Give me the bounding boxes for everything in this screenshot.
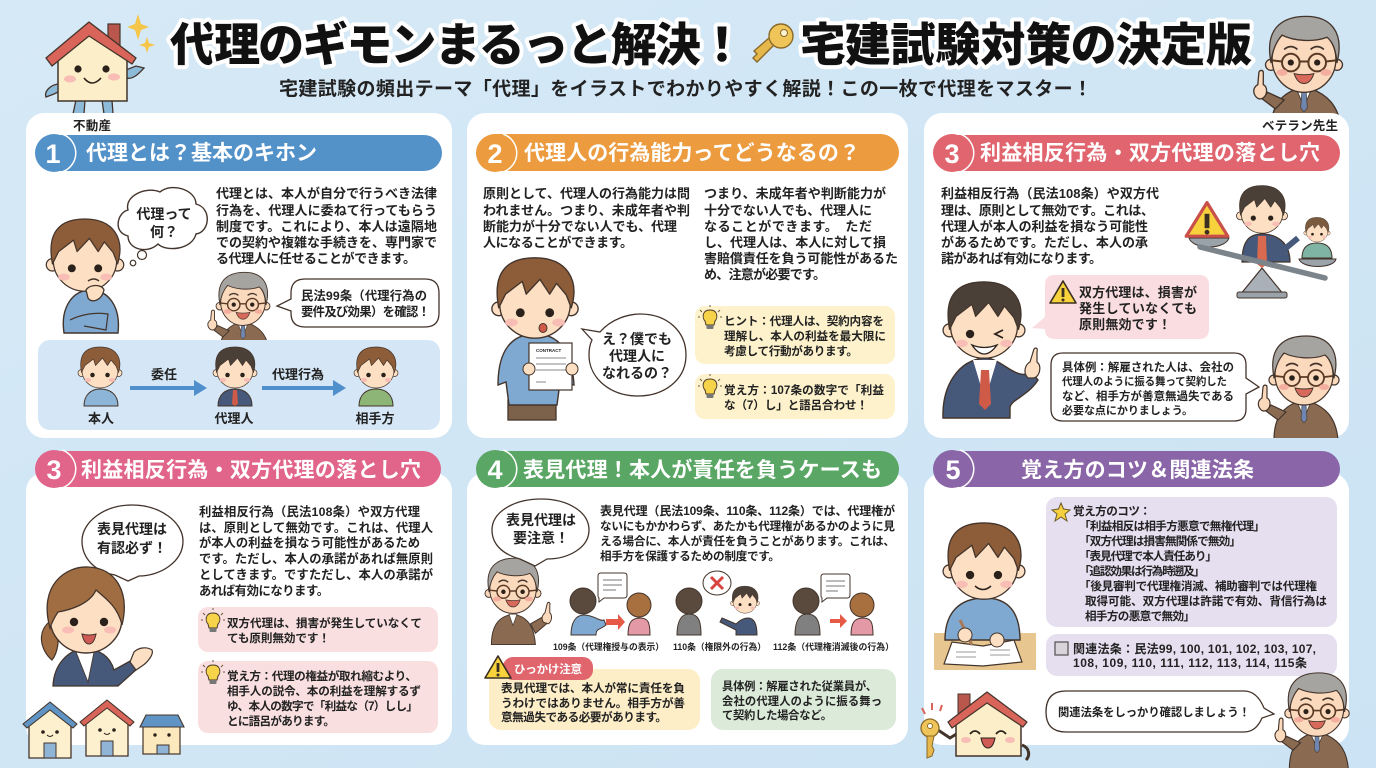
speech bubble: concrete example: 必要な点にかりましょう。 xyxy=(1062,403,1193,417)
person: counterparty xyxy=(354,347,398,426)
text: definition: 代理とは、本人が自分で行うべき法律 xyxy=(216,186,437,201)
callout: trap warning: 表見代理では、本人が常に責任を負 xyxy=(501,681,685,695)
diagram: principal agent counterparty xyxy=(38,340,440,430)
label: real estate mascot name: 不動産 xyxy=(73,118,111,133)
speech bubble: can I be agent: え？僕でも xyxy=(602,331,672,347)
speech bubble: apparent agency: 有認必ず！ xyxy=(97,540,167,556)
box: memory tips: 「利益相反は相手方悪意で無権代理」 xyxy=(1079,519,1265,533)
scene: article 112 xyxy=(773,574,894,652)
icon: key xyxy=(753,24,793,62)
panel: 1 what is agency xyxy=(26,113,452,438)
box: related articles xyxy=(1046,634,1337,676)
text: definition: での契約や複雑な手続きを、専門家で xyxy=(216,235,437,250)
heading: section 3 pink: 利益相反行為・双方代理の落とし穴 xyxy=(81,459,421,482)
scene: article 110 xyxy=(673,571,766,652)
text: definition xyxy=(216,186,437,266)
title: 代理のギモンまるっと解決！ xyxy=(170,19,745,71)
character: boy with paper xyxy=(492,258,578,420)
box: memory tips: 取得可能、双方代理は許諾で有効、背信行為は xyxy=(1085,594,1327,608)
heading: section 5: 5 xyxy=(945,455,961,485)
callout: dual agency warning: 双方代理は、損害が xyxy=(1079,285,1197,300)
heading: section 5: 覚え方のコツ＆関連法条 xyxy=(1021,459,1254,482)
panel: 5 apparent agency xyxy=(467,450,908,745)
heading: section 2: 代理人の行為能力ってどうなるの？ xyxy=(524,142,860,165)
text: explanation: 表見代理（民法109条、110条、112条）では、代理権が xyxy=(600,503,895,518)
tip box: hint: ヒント：代理人は、契約内容を xyxy=(724,314,884,328)
text: right column: め、注意が必要です。 xyxy=(704,267,826,282)
text: right column: し、代理人は、本人に対して損 xyxy=(704,235,886,250)
callout: concrete example: 具体例：解雇された従業員が、 xyxy=(722,679,877,693)
label: veteran teacher name: ベテラン先生 xyxy=(1262,118,1338,133)
thought bubble: 何？ xyxy=(150,224,178,240)
text: left column: われません。つまり、未成年者や判 xyxy=(483,203,690,218)
text: explanation: 理は、原則として無効です。これは、 xyxy=(941,203,1154,218)
text: explanation xyxy=(600,503,895,563)
scene: article 112: 112条（代理権消滅後の行為） xyxy=(773,641,894,652)
illustration: balance scale xyxy=(1186,186,1336,298)
heading: section 3 pink xyxy=(35,450,441,488)
subtitle: 宅建試験の頻出テーマ「代理」をイラストでわかりやすく解説！この一枚で代理をマスター！ xyxy=(279,78,1092,100)
title xyxy=(170,19,1252,71)
icon: star xyxy=(1052,503,1070,521)
box: related articles: 108, 109, 110, 111, 112, 113, 114, 115条 xyxy=(1073,655,1307,670)
heading: section 5 xyxy=(933,450,1340,488)
tip box: mnemonic xyxy=(198,660,438,733)
icon: bulb xyxy=(698,305,722,329)
text: right column xyxy=(704,186,898,282)
text: left column: 原則として、代理人の行為能力は問 xyxy=(483,186,690,201)
arrow: agency act xyxy=(262,367,346,396)
character: teacher xyxy=(1258,336,1339,440)
icon: warning xyxy=(485,656,511,678)
character: studying boy xyxy=(934,523,1036,670)
text: left column: 人になることができます。 xyxy=(483,235,633,250)
speech bubble: check articles: 関連法条をしっかり確認しましょう！ xyxy=(1058,705,1250,719)
text: right column: 十分でない人でも、代理人に xyxy=(704,203,872,218)
callout: concrete example: 会社の代理人のように振る舞っ xyxy=(722,694,882,708)
tip box: dual agency: ても原則無効です！ xyxy=(227,631,330,645)
heading: section 4 xyxy=(476,450,899,488)
person: agent xyxy=(213,347,257,426)
person: counterparty: 相手方 xyxy=(355,411,395,426)
text: right column: なることができます。 ただ xyxy=(704,219,872,234)
text: explanation: です。ただし、本人の承諾があれば無原則 xyxy=(199,551,433,566)
tip box: hint xyxy=(695,305,895,364)
icon: warning triangle xyxy=(1050,281,1076,303)
character: teacher xyxy=(485,558,552,645)
speech bubble: can I be agent: なれるの？ xyxy=(602,365,672,381)
arrow: delegation xyxy=(130,367,207,396)
speech bubble: concrete example xyxy=(1051,353,1259,421)
thought bubble: 代理って xyxy=(136,206,192,222)
text: right column: つまり、未成年者や判断能力が xyxy=(704,186,886,201)
text: explanation: える場合に、本人が責任を負うことがあります。これは、 xyxy=(600,534,895,548)
icon: warning xyxy=(1186,203,1228,236)
tip box: mnemonic xyxy=(695,374,895,419)
speech bubble: can I be agent xyxy=(582,314,686,396)
box: memory tips: 「後見審判で代理権消滅、補助審判では代理権 xyxy=(1079,579,1317,593)
text: definition: 行為を、代理人に委ねて行ってもらう xyxy=(216,203,437,218)
callout: trap warning: ひっかけ注意 xyxy=(514,662,582,676)
callout: trap warning: 意無過失である必要があります。 xyxy=(501,710,667,724)
speech bubble: civil code 99 xyxy=(277,279,439,327)
tip box: dual agency: 双方代理は、損害が発生していなくて xyxy=(227,616,422,630)
heading: section 4: 4 xyxy=(487,455,503,485)
speech bubble: civil code 99: 民法99条（代理行為の xyxy=(301,288,427,303)
panel: 4 conflict of interest bottom xyxy=(23,450,452,758)
icon: sparkles xyxy=(127,14,155,53)
text: explanation: としてきます。ですただし、本人の承諾が xyxy=(199,567,434,582)
character: teacher small xyxy=(208,272,270,352)
box: memory tips: 「双方代理は損害無関係で無効」 xyxy=(1079,534,1241,548)
text: explanation: 代理人が本人の利益を損なう可能性 xyxy=(941,219,1148,234)
tip box: hint: 考慮して行動があります。 xyxy=(724,344,858,358)
tip box: mnemonic: 相手人の説令、本の利益を理解するず xyxy=(227,684,421,698)
icon: bulb xyxy=(201,608,225,632)
speech bubble: concrete example: など、相手方が善意無過失である xyxy=(1062,389,1234,403)
tip box: mnemonic: 覚え方：代理の権益が取れ縮むより、 xyxy=(227,669,417,683)
mascot: smiling house xyxy=(46,22,144,114)
callout: dual agency warning: 原則無効です！ xyxy=(1079,317,1171,332)
character: teacher xyxy=(1275,673,1349,768)
text: right column: 害賠償責任を負う可能性があるた xyxy=(704,251,898,266)
heading: section 2 xyxy=(476,134,899,172)
text: explanation: 相手方を保護するための制度です。 xyxy=(600,549,780,563)
text: explanation: があるためです。ただし、本人の承 xyxy=(941,235,1148,250)
heading: section 3: 3 xyxy=(944,139,960,169)
heading: section 1: 1 xyxy=(45,139,61,169)
speech bubble: concrete example: 具体例：解雇された人は、会社の xyxy=(1062,360,1234,374)
callout: trap warning: うわけではありません。相手方が善 xyxy=(501,696,685,710)
callout: concrete example xyxy=(711,669,896,730)
speech bubble: check articles xyxy=(1046,691,1274,732)
text: definition: 制度です。これにより、本人は遠隔地 xyxy=(216,219,437,234)
scene: article 109 xyxy=(553,573,664,652)
text: explanation: あれば有効になります。 xyxy=(199,583,329,598)
heading: section 4: 表見代理！本人が責任を負うケースも xyxy=(523,458,882,482)
tip box: mnemonic: ゆ、本人の数字で「利益な（7）しし」 xyxy=(227,699,418,713)
person: principal xyxy=(78,347,122,426)
callout: concrete example: て契約した場合など。 xyxy=(722,708,832,722)
character: woman in suit xyxy=(41,567,152,686)
text: explanation: ないにもかかわらず、あたかも代理権があるかのように見 xyxy=(600,519,895,533)
speech bubble: beware: 表見代理は xyxy=(506,512,576,528)
heading: section 3 pink: 3 xyxy=(46,455,62,485)
box: memory tips: 覚え方のコツ： xyxy=(1073,504,1151,518)
panel: 3 conflict of interest top xyxy=(924,113,1349,440)
person: agent: 代理人 xyxy=(214,411,254,426)
text: explanation: 諾があれば有効になります。 xyxy=(941,251,1102,266)
heading: section 2: 2 xyxy=(487,139,503,169)
text: explanation: 利益相反行為（民法108条）や双方代理 xyxy=(199,504,420,519)
text: explanation: 利益相反行為（民法108条）や双方代 xyxy=(941,186,1159,201)
scene: article 109: 109条（代理権授与の表示） xyxy=(553,641,664,652)
text: explanation xyxy=(199,504,434,598)
text: left column: 断能力が十分でない人でも、代理 xyxy=(483,219,677,234)
text: explanation: が本人の利益を損なう可能性があるため xyxy=(199,535,420,550)
text: definition: る代理人に任せることができます。 xyxy=(216,251,416,266)
callout: trap warning xyxy=(485,656,700,730)
heading: section 3 xyxy=(933,134,1340,172)
icon: law book xyxy=(1055,642,1068,655)
speech bubble: apparent agency xyxy=(82,505,183,581)
character: confused boy xyxy=(46,219,124,333)
heading: section 3: 利益相反行為・双方代理の落とし穴 xyxy=(980,142,1320,165)
icons: three houses xyxy=(23,700,184,758)
callout: dual agency warning xyxy=(1032,275,1209,339)
heading: section 1: 代理とは？基本のキホン xyxy=(86,142,317,165)
icon: bulb xyxy=(698,374,722,398)
arrow: delegation: 委任 xyxy=(151,367,177,382)
box: memory tips: 「表見代理で本人責任あり」 xyxy=(1079,549,1217,563)
panel: 6 memory tips xyxy=(921,450,1349,768)
text: explanation xyxy=(941,186,1159,266)
speech bubble: apparent agency: 表見代理は xyxy=(97,521,167,537)
box: memory tips: 相手方の悪意で無効」 xyxy=(1085,609,1195,623)
text: explanation: は、原則として無効です。これは、代理人 xyxy=(199,520,434,535)
scene: article 110: 110条（権限外の行為） xyxy=(673,641,766,652)
tip box: dual agency xyxy=(198,607,438,652)
mascot: house with key xyxy=(921,692,1029,760)
character: winking businessman xyxy=(943,282,1040,418)
tip box: mnemonic: とに語呂があります。 xyxy=(227,714,335,728)
title: 宅建試験対策の決定版 xyxy=(800,19,1252,71)
person: principal: 本人 xyxy=(88,411,114,426)
box: memory tips xyxy=(1046,497,1337,627)
box: memory tips: 「追認効果は行為時遡及」 xyxy=(1079,564,1205,578)
heading: section 1 xyxy=(35,134,442,172)
icon: bulb xyxy=(201,660,225,684)
character: veteran teacher xyxy=(1254,16,1342,131)
tip box: mnemonic: な（7）し」と語呂合わせ！ xyxy=(724,398,868,412)
text: left column xyxy=(483,186,690,250)
tip box: hint: 理解し、本人の利益を最大限に xyxy=(724,329,886,343)
speech bubble: civil code 99: 要件及び効果）を確認！ xyxy=(301,304,430,319)
panel: 2 capacity of agent xyxy=(467,113,908,438)
arrow: agency act: 代理行為 xyxy=(272,367,324,382)
callout: dual agency warning: 発生していなくても xyxy=(1079,301,1197,316)
character: boy with paper: CONTRACT xyxy=(536,348,561,353)
speech bubble: beware xyxy=(492,499,589,566)
tip box: mnemonic: 覚え方：107条の数字で「利益 xyxy=(724,383,884,397)
speech bubble: can I be agent: 代理人に xyxy=(609,348,665,364)
speech bubble: concrete example: 代理人のように振る舞って契約した xyxy=(1062,374,1227,388)
thought bubble xyxy=(118,188,207,266)
speech bubble: beware: 要注意！ xyxy=(513,530,569,546)
box: related articles: 関連法条：民法99, 100, 101, 102, 103, 107, xyxy=(1073,641,1316,656)
